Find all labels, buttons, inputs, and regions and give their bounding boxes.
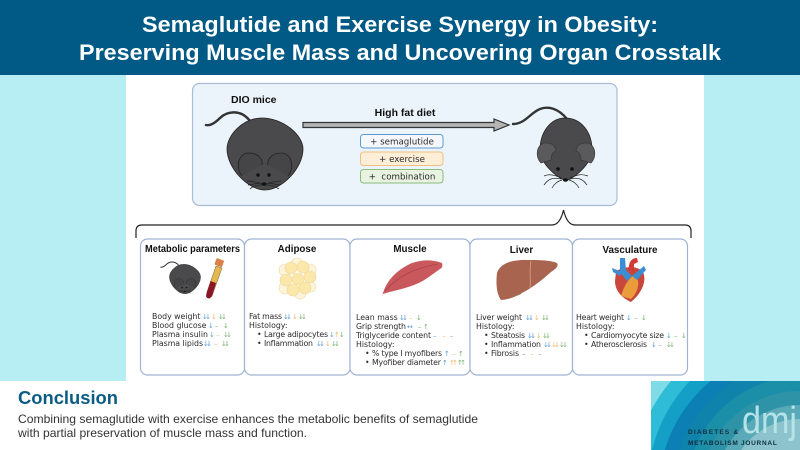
text: vasculature results: ↓↓ — [666, 341, 674, 349]
text: liver results: ↓↓ — [525, 314, 533, 322]
text: muscle results: Lean mass — [356, 313, 398, 322]
option: exercise: + exercise — [379, 155, 425, 165]
bracket — [136, 210, 691, 238]
text: muscle results: Myofiber diameter — [372, 358, 442, 367]
text: muscle results: Histology: — [356, 340, 394, 349]
text: liver results: Fibrosis — [491, 349, 519, 358]
option: exercise — [360, 152, 443, 166]
text: liver results: ↓↓ — [543, 341, 551, 349]
conclusion — [17, 388, 478, 440]
header band — [0, 0, 800, 75]
logo name: METABOLISM JOURNAL — [688, 440, 778, 447]
text: muscle results: ↑ — [442, 359, 448, 367]
text: liver results: ↓↓ — [541, 314, 549, 322]
panel: metabolic parameters — [140, 239, 244, 375]
text: metabolic results: ↓↓ — [218, 313, 226, 321]
logo name — [688, 429, 778, 447]
text: adipose results: Large adipocytes — [264, 330, 328, 339]
text: vasculature results: • — [584, 340, 589, 349]
text: metabolic results: Plasma lipids — [152, 339, 203, 348]
text: vasculature results: Cardiomyocyte size — [591, 331, 664, 340]
text: liver results — [476, 313, 567, 358]
heading: Vasculature — [602, 245, 658, 256]
background — [0, 75, 800, 381]
text: muscle results: – — [409, 314, 413, 322]
panel: study design — [192, 84, 617, 206]
heading: Adipose — [278, 244, 317, 255]
text: liver results: Steatosis — [491, 331, 525, 340]
text: muscle results: ↑ — [423, 323, 429, 331]
text: adipose results: Histology: — [249, 321, 287, 330]
text: adipose results: ↑ — [334, 331, 340, 339]
panel: vasculature — [572, 239, 688, 375]
text: liver results: – — [538, 350, 542, 358]
option: combination: + combination — [369, 172, 435, 182]
text: adipose results: ↓↓ — [331, 340, 339, 348]
text: metabolic results: – — [214, 340, 218, 348]
text: liver results: • — [484, 340, 489, 349]
arrow: diet progression — [303, 119, 509, 131]
text: muscle results: ↑ — [444, 350, 450, 358]
text: liver results: Liver weight — [476, 313, 522, 322]
icon: heart — [612, 258, 646, 302]
text: metabolic results: ↓ — [209, 331, 215, 339]
text: muscle results: Triglyceride content — [355, 331, 431, 340]
text: liver results: ↓ — [534, 314, 540, 322]
panel: muscle — [350, 239, 470, 375]
icon: mouse — [161, 262, 201, 294]
text: metabolic results — [152, 312, 231, 348]
text: adipose results: Fat mass — [249, 312, 282, 321]
text: adipose results: ↓ — [329, 331, 335, 339]
text: vasculature results: ↓ — [651, 341, 657, 349]
text: metabolic results: ↓↓ — [223, 331, 231, 339]
conclusion text: with partial preservation of muscle mass and function. — [17, 426, 307, 440]
center white panel — [126, 75, 704, 381]
text: metabolic results: ↓ — [223, 322, 229, 330]
text: muscle results: • — [365, 358, 370, 367]
text: muscle results: ↑↑ — [457, 359, 465, 367]
panel: liver — [470, 239, 572, 375]
text: adipose results: ↓ — [292, 313, 298, 321]
text: liver results: Inflammation — [491, 340, 541, 349]
option: semaglutide: + semaglutide — [370, 138, 434, 148]
text: muscle results: ↓ — [416, 314, 422, 322]
text: vasculature results: – — [674, 332, 678, 340]
panel: adipose — [244, 239, 350, 375]
text: adipose results: ↓↓ — [316, 340, 324, 348]
text: adipose results: Inflammation — [264, 339, 313, 348]
text: liver results: ↓ — [536, 332, 542, 340]
text: adipose results: ↓ — [339, 331, 345, 339]
text: muscle results: Grip strength — [356, 322, 406, 331]
icon: blood tube — [206, 258, 224, 298]
text: liver results: – — [530, 350, 534, 358]
text: muscle results: ↓↓ — [399, 314, 407, 322]
heading: Liver — [510, 245, 533, 256]
text: vasculature results: – — [658, 341, 662, 349]
text: liver results: – — [522, 350, 526, 358]
text: muscle results: – — [433, 332, 437, 340]
text: liver results: • — [484, 349, 489, 358]
text: muscle results: ↑↑ — [449, 359, 457, 367]
option: combination — [360, 170, 443, 183]
title: Semaglutide and Exercise Synergy in Obesity: — [142, 12, 658, 37]
text: liver results: ↓↓ — [527, 332, 535, 340]
icon: fat cells — [279, 258, 316, 299]
option: semaglutide — [360, 134, 443, 148]
text: liver results: ↓↓ — [551, 341, 559, 349]
text: muscle results: – — [452, 350, 456, 358]
text: adipose results: • — [257, 330, 262, 339]
text: muscle results: % type I myofibers — [372, 349, 442, 358]
title: Preserving Muscle Mass and Uncovering Organ Crosstalk — [79, 40, 721, 65]
heading: Muscle — [393, 244, 427, 255]
text: muscle results: – — [442, 332, 446, 340]
text: metabolic results: ↓↓ — [202, 313, 210, 321]
text: liver results: • — [484, 331, 489, 340]
text: vasculature results: ↓ — [641, 314, 647, 322]
text: muscle results: – — [450, 332, 454, 340]
text: vasculature results: Atherosclerosis — [591, 340, 647, 349]
text: adipose results — [249, 312, 345, 348]
text: adipose results: ↓ — [325, 340, 331, 348]
conclusion text — [17, 412, 478, 440]
text: vasculature results: ↓ — [666, 332, 672, 340]
text: adipose results: ↓↓ — [283, 313, 291, 321]
text: metabolic results: ↓ — [208, 322, 214, 330]
text: liver results: Histology: — [476, 322, 514, 331]
label: DIO mice: DIO mice — [231, 94, 277, 106]
text: vasculature results — [576, 313, 687, 349]
text: vasculature results: Histology: — [576, 322, 614, 331]
text: adipose results: • — [257, 339, 262, 348]
text: liver results: ↓↓ — [542, 332, 550, 340]
icon: lean mouse — [513, 108, 595, 188]
text: metabolic results: ↓↓ — [203, 340, 211, 348]
text: vasculature results: ↓ — [681, 332, 687, 340]
text: metabolic results: Plasma insulin — [152, 330, 208, 339]
conclusion heading: Conclusion — [18, 388, 118, 408]
icon: liver — [496, 260, 558, 300]
text: metabolic results: ↓ — [211, 313, 217, 321]
text: metabolic results: ↓↓ — [221, 340, 229, 348]
text: adipose results: ↓↓ — [298, 313, 306, 321]
journal logo — [651, 381, 800, 450]
text: vasculature results: Heart weight — [576, 313, 624, 322]
text: muscle results: ↑ — [458, 350, 464, 358]
logo name: DIABETES & — [688, 429, 739, 436]
text: liver results: ↓↓ — [559, 341, 567, 349]
text: muscle results: ↔ — [407, 323, 413, 331]
text: metabolic results: – — [216, 331, 220, 339]
title — [79, 12, 721, 65]
text: vasculature results: ↓ — [626, 314, 632, 322]
label: high fat diet: High fat diet — [375, 107, 436, 119]
icon: muscle — [382, 260, 442, 297]
conclusion text: Combining semaglutide with exercise enhances the metabolic benefits of semaglutide — [18, 412, 478, 426]
text: muscle results: – — [418, 323, 422, 331]
text: vasculature results: – — [634, 314, 638, 322]
text: metabolic results: Blood glucose — [152, 321, 207, 330]
text: muscle results — [355, 313, 465, 367]
text: vasculature results: • — [584, 331, 589, 340]
text: metabolic results: – — [215, 322, 219, 330]
heading: Metabolic parameters — [145, 244, 241, 255]
text: metabolic results: Body weight — [152, 312, 200, 321]
icon: obese mouse — [206, 112, 303, 190]
text: muscle results: • — [365, 349, 370, 358]
